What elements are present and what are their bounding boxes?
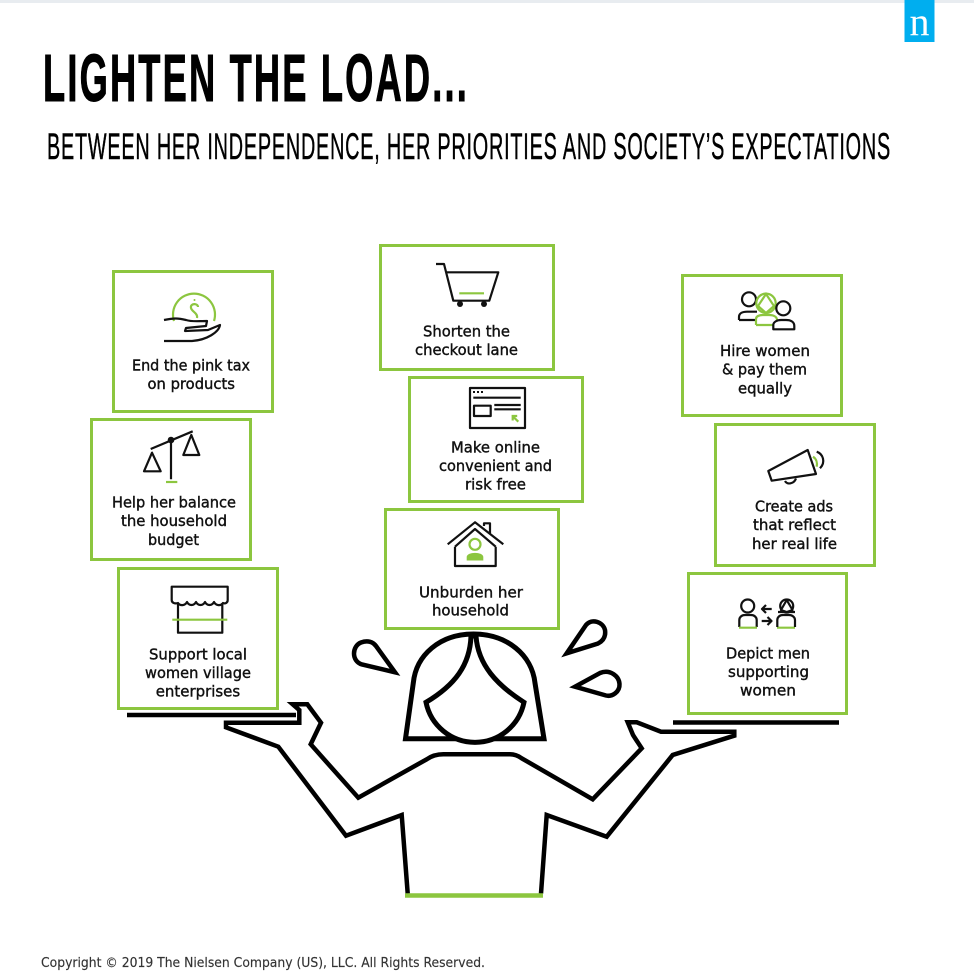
label: women [740,682,796,700]
panel: hire women [682,276,842,416]
label: supporting [728,663,809,681]
label [419,583,524,620]
icon: man and woman with arrows [739,600,795,628]
panel: support local women [118,568,278,708]
label: budget [148,531,199,549]
face [426,636,524,742]
label [720,342,810,397]
label: Help her balance [112,494,236,512]
label: Shorten the [423,323,510,341]
panel: depict men supporting women [688,574,846,714]
panel: balance the budget [92,420,250,560]
label [752,498,837,553]
label [132,357,250,393]
label: End the pink tax [132,357,250,375]
label [415,323,518,359]
icon: shopping cart [436,264,498,307]
label: Make online [451,438,540,456]
logo: Nielsen n: n [910,0,930,44]
label: on products [148,375,235,393]
figure: woman balancing trays [127,621,839,896]
drop: left [354,641,395,672]
label: household [432,602,509,620]
label: Create ads [755,498,833,516]
icon: scales [144,431,199,482]
label [726,644,810,700]
label: & pay them [722,361,807,379]
label: that reflect [753,516,836,534]
panel: shorten the checkout lane [380,246,554,370]
icon: three people [739,292,794,329]
label: risk free [465,476,526,494]
label: the household [121,512,227,530]
drop: lower right [575,672,620,696]
label [112,494,236,549]
icon: storefront [172,587,228,633]
drop: upper right [567,621,605,653]
label [439,438,552,494]
body base [405,893,543,898]
left tray [127,713,296,717]
label: convenient and [439,457,552,475]
icon: megaphone [768,450,823,483]
right tray [673,720,839,725]
label: Hire women [720,342,810,360]
panel: end the pink tax [114,272,272,412]
body and arms [226,704,734,894]
icon: house with person [448,522,503,566]
icon: hand holding coin [164,294,220,341]
label: Support local [149,645,247,663]
panel: create ads [716,424,874,566]
footer: copyright: Copyright © 2019 The Nielsen Company (US), LLC. All Rights Reserved. [41,955,485,971]
icon: browser window [470,388,525,428]
label: women village [145,664,251,682]
hair [406,634,544,739]
label [145,645,251,701]
label: Unburden her [419,583,524,601]
label: checkout lane [415,341,518,359]
label: her real life [752,535,837,553]
panel: make online convenient [410,378,582,502]
label: enterprises [156,683,240,701]
label: equally [738,379,792,397]
logo: Nielsen n [904,0,934,44]
panel: unburden her household [386,510,558,628]
title: LIGHTEN THE LOAD... [43,41,469,116]
label: Depict men [726,644,810,662]
